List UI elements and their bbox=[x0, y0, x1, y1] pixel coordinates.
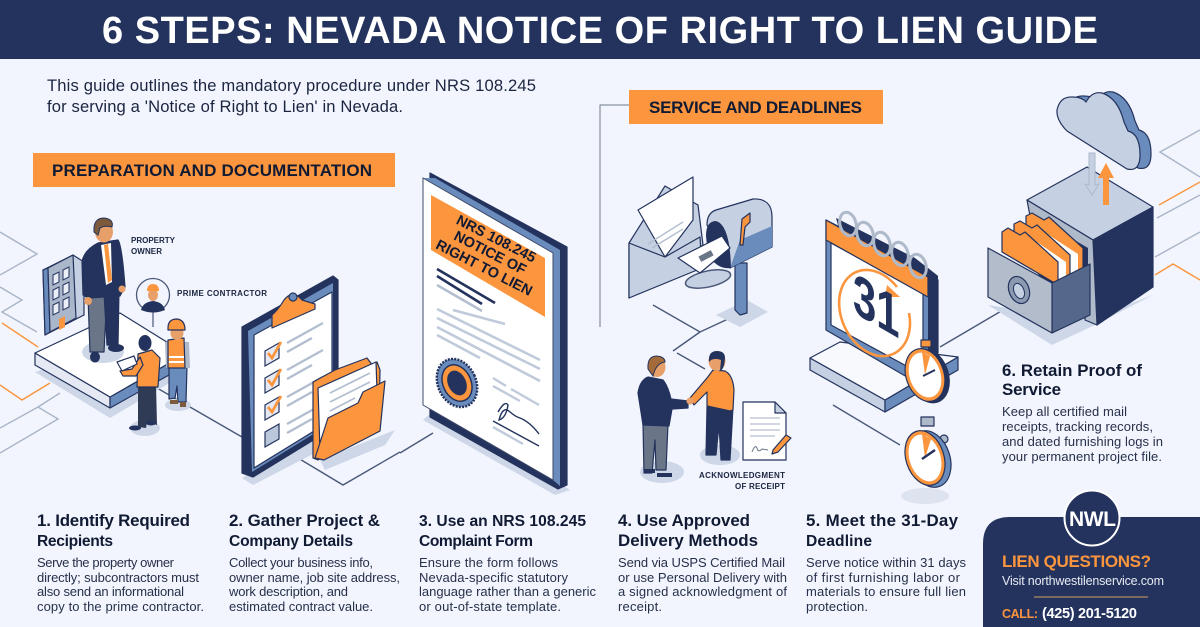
icon: folders in drawer bbox=[1002, 213, 1083, 285]
signature bbox=[493, 404, 539, 446]
step 2: work description, and bbox=[228, 584, 348, 599]
icon: envelope bbox=[629, 177, 703, 298]
figure: crew member with clipboard bbox=[117, 335, 160, 430]
icon: stopwatch on calendar bbox=[899, 340, 957, 409]
step 5 bbox=[806, 511, 966, 614]
label: acknowledgment of receipt: ACKNOWLEDGMENT bbox=[699, 471, 785, 480]
icon: prime contractor badge bbox=[136, 278, 170, 327]
figure: right man bbox=[686, 351, 734, 460]
step 1: Serve the property owner bbox=[37, 555, 175, 570]
step 2: estimated contract value. bbox=[229, 599, 373, 614]
logo badge: NWL: NWL bbox=[1069, 508, 1116, 531]
section heading: preparation and documentation: PREPARATION AND DOCUMENTATION bbox=[52, 161, 372, 180]
step 1 bbox=[37, 511, 204, 614]
step 1: also send an informational bbox=[37, 584, 184, 599]
logo badge: NWL bbox=[1064, 490, 1120, 546]
callout: lien questions contact box: (425) 201-5120 bbox=[1042, 606, 1137, 622]
step 1: directly; subcontractors must bbox=[37, 570, 199, 585]
icon: cabinet body bbox=[1020, 167, 1153, 325]
callout: lien questions contact box bbox=[983, 490, 1200, 627]
checklist bbox=[265, 323, 323, 447]
icon: official seal bbox=[429, 352, 485, 414]
icon: sync arrows bbox=[1085, 153, 1114, 205]
step 3: Complaint Form bbox=[419, 533, 533, 550]
step 1: copy to the prime contractor. bbox=[37, 599, 204, 614]
step 2: Collect your business info, bbox=[229, 555, 373, 570]
title: 6 STEPS: NEVADA NOTICE OF RIGHT TO LIEN GUIDE bbox=[102, 10, 1098, 52]
step 4: a signed acknowledgment of bbox=[618, 584, 787, 599]
section heading: preparation and documentation bbox=[33, 153, 395, 187]
step 2: Company Details bbox=[229, 533, 353, 550]
date number 31 bbox=[839, 261, 910, 356]
illustration: calendar on platform with stopwatch bbox=[810, 210, 958, 412]
icon: office building bbox=[43, 255, 84, 335]
step 5: materials to ensure full lien bbox=[806, 584, 966, 599]
intro text: This guide outlines the mandatory procedure under NRS 108.245 bbox=[47, 76, 536, 95]
icon: signed receipt bbox=[743, 402, 791, 460]
step 4: Send via USPS Certified Mail bbox=[618, 555, 785, 570]
step 6: receipts, tracking records, bbox=[1002, 419, 1153, 434]
callout: lien questions contact box: CALL: bbox=[1002, 607, 1038, 621]
illustration: file cabinet with cloud bbox=[988, 92, 1153, 345]
label: property owner bbox=[131, 236, 176, 256]
callout: lien questions contact box: Visit northwestilenservice.com bbox=[1002, 574, 1164, 588]
icon: mailbox bbox=[678, 199, 772, 315]
step 3: Nevada-specific statutory bbox=[419, 570, 568, 585]
illustration: handshake bbox=[638, 351, 791, 483]
step 6: 6. Retain Proof of bbox=[1002, 361, 1142, 380]
step 5: of first furnishing labor or bbox=[806, 570, 961, 585]
calendar rings bbox=[837, 210, 929, 280]
step 1: 1. Identify Required bbox=[37, 511, 190, 530]
section heading: service and deadlines bbox=[629, 90, 883, 124]
step 4: Delivery Methods bbox=[618, 531, 758, 550]
icon: stopwatch bbox=[898, 417, 958, 504]
step 5: Serve notice within 31 days bbox=[806, 555, 966, 570]
step 3: language rather than a generic bbox=[419, 584, 596, 599]
illustration: clipboard with checklist and folder bbox=[242, 276, 395, 485]
illustration: envelope and mailbox bbox=[629, 177, 772, 327]
step 6: Service bbox=[1002, 380, 1061, 399]
step 3: Ensure the form follows bbox=[419, 555, 558, 570]
icon: cloud bbox=[1057, 92, 1151, 169]
step 4: or use Personal Delivery with bbox=[618, 570, 787, 585]
orange title block: NRS 108.245 bbox=[453, 213, 538, 266]
step 5: Deadline bbox=[806, 533, 872, 550]
step 6: Keep all certified mail bbox=[1002, 404, 1127, 419]
illustration: property owner and contractors on platform bbox=[35, 218, 191, 436]
step 6 bbox=[1002, 361, 1163, 464]
intro text: for serving a 'Notice of Right to Lien' in Nevada. bbox=[47, 97, 403, 116]
step 3: or out-of-state template. bbox=[419, 599, 561, 614]
label: acknowledgment of receipt: OF RECEIPT bbox=[735, 482, 785, 491]
step 3: 3. Use an NRS 108.245 bbox=[419, 513, 586, 530]
step 2 bbox=[228, 511, 400, 614]
icon: orange folder bbox=[313, 358, 395, 470]
step 5: 5. Meet the 31-Day bbox=[806, 511, 959, 530]
step 2: owner name, job site address, bbox=[229, 570, 400, 585]
icon: drawer bbox=[988, 248, 1090, 333]
callout: lien questions contact box: LIEN QUESTIONS? bbox=[1002, 552, 1151, 571]
step 4: receipt. bbox=[618, 599, 662, 614]
figure: left man bbox=[638, 356, 688, 477]
label: acknowledgment of receipt bbox=[699, 471, 785, 491]
label: prime contractor: PRIME CONTRACTOR bbox=[177, 289, 267, 298]
figure: property owner bbox=[82, 218, 126, 362]
step 1: Recipients bbox=[37, 533, 113, 550]
step 6: and dated furnishing logs in bbox=[1002, 434, 1163, 449]
icon: clip bbox=[272, 293, 315, 328]
intro text bbox=[47, 76, 536, 116]
label: property owner: PROPERTY bbox=[131, 236, 176, 245]
label: property owner: OWNER bbox=[131, 247, 162, 256]
step 4 bbox=[618, 511, 787, 614]
step 5: protection. bbox=[806, 599, 868, 614]
figure: hard hat worker bbox=[165, 319, 190, 407]
date number 31: 31 bbox=[853, 261, 899, 352]
orange title block: NOTICE OF bbox=[451, 228, 529, 279]
orange title block: RIGHT TO LIEN bbox=[433, 237, 535, 300]
step 3 bbox=[419, 513, 596, 614]
section heading: service and deadlines: SERVICE AND DEADLINES bbox=[649, 98, 862, 117]
document body lines bbox=[437, 269, 540, 381]
title banner bbox=[0, 0, 1200, 59]
step 6: your permanent project file. bbox=[1002, 449, 1162, 464]
step 2: 2. Gather Project & bbox=[229, 511, 380, 530]
illustration: notice of right to lien document bbox=[423, 173, 570, 495]
orange title block bbox=[431, 195, 545, 317]
step 4: 4. Use Approved bbox=[618, 511, 750, 530]
